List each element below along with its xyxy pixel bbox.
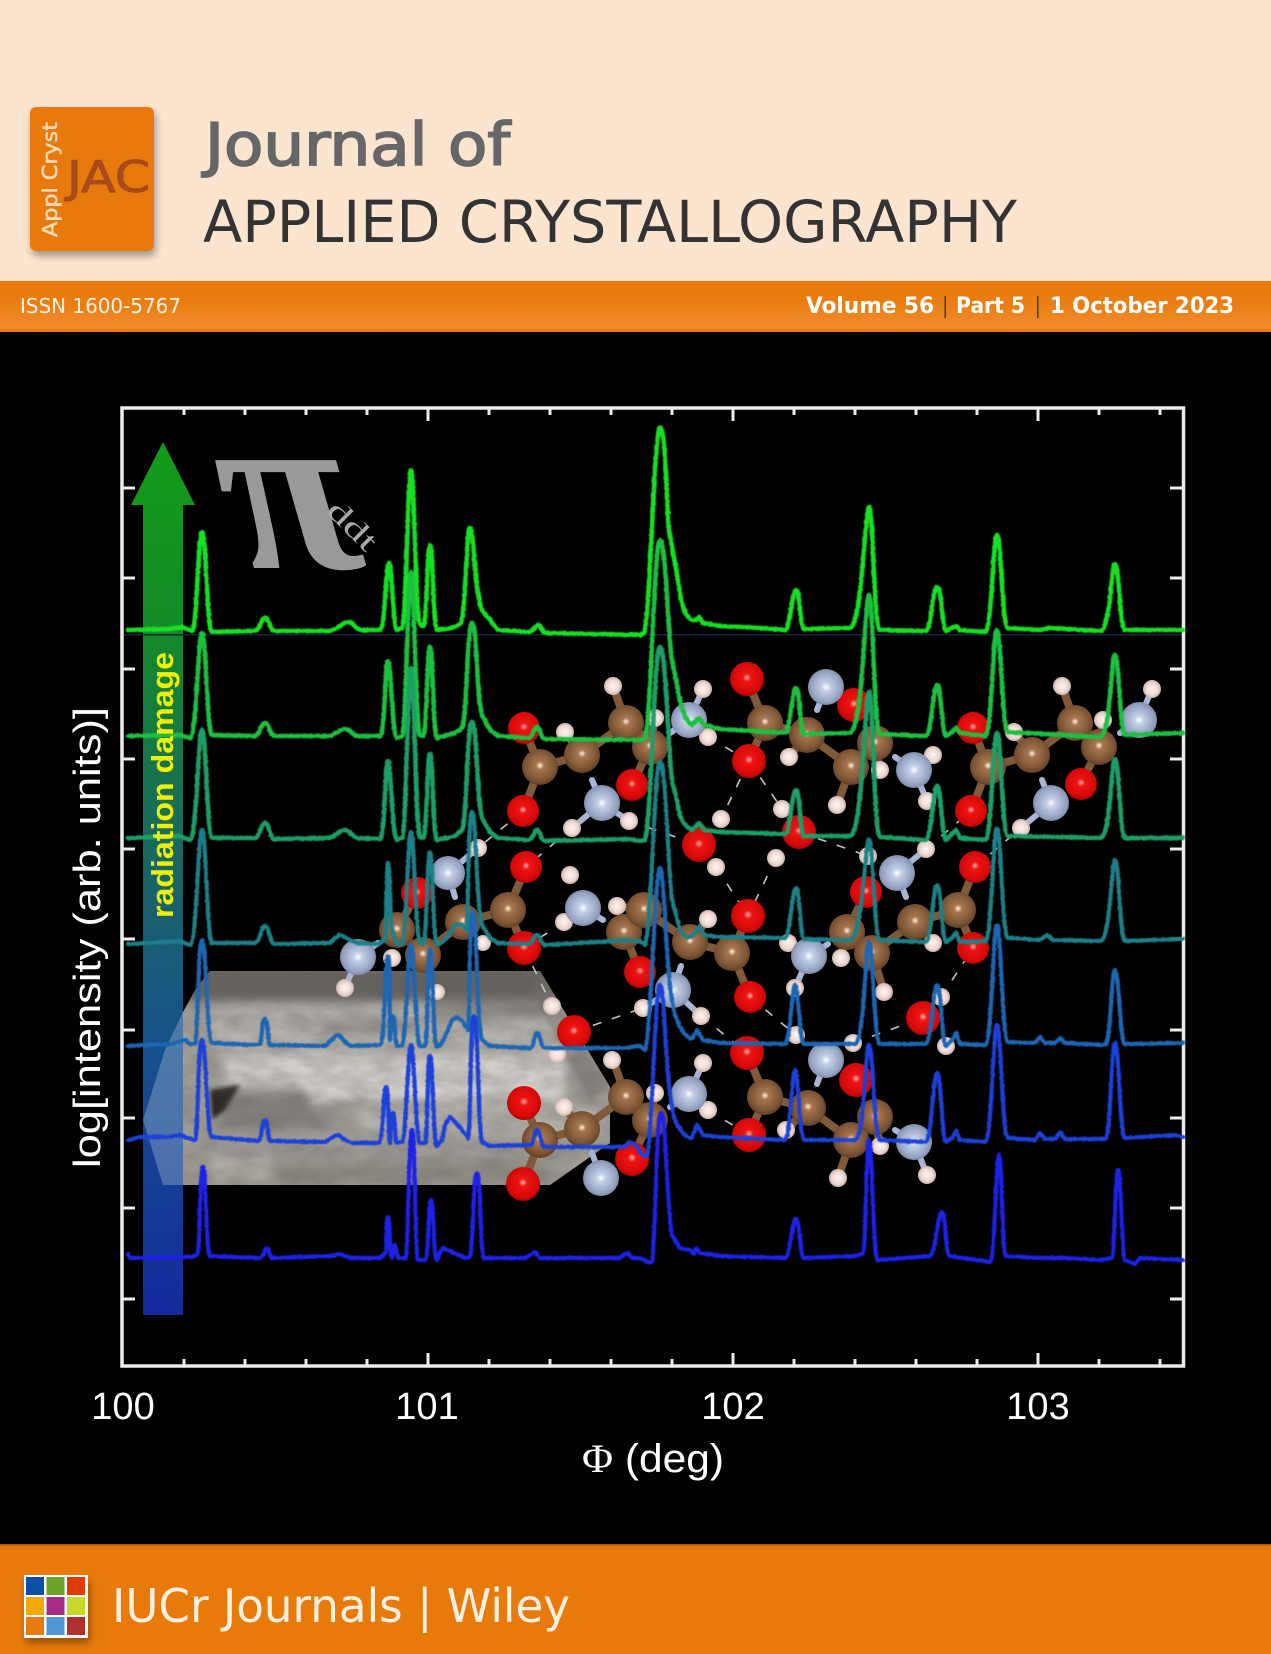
trace 2: green: [128, 540, 1183, 740]
faint navy reference line: [122, 634, 1183, 636]
trace 4: teal: [128, 762, 1183, 945]
covalent bonds: [397, 679, 1103, 1184]
nitrogen atoms: [340, 669, 1157, 1196]
part: Part 5: [956, 294, 1025, 319]
date: 1 October 2023: [1050, 294, 1234, 319]
trace 5: medium blue: [128, 868, 1183, 1050]
trace 7: lowest dose, pure blue: [128, 1113, 1183, 1264]
oxygen atoms: [401, 662, 1097, 1201]
plot frame and ticks: [122, 408, 1184, 1366]
title: Applied Crystallography: APPLIED CRYSTALLOGRAPHY: [203, 188, 1018, 256]
pi ddt logo: [180, 358, 385, 619]
trace 3: sea green: [128, 647, 1183, 841]
x axis tick labels: 100: [91, 1386, 155, 1428]
ISSN: ISSN 1600-5767: [20, 294, 181, 318]
title: Journal of: Journal of: [201, 110, 511, 179]
carbon atoms: [379, 705, 1117, 1158]
header background: [0, 0, 1271, 281]
logo text: Appl Cryst: Appl Cryst: [38, 122, 62, 237]
trace 6: royal blue: [128, 985, 1183, 1156]
crystal photograph: [143, 965, 620, 1190]
logo text: JAC: JAC: [64, 152, 150, 203]
x axis tick labels: [91, 1386, 1070, 1428]
y axis label: log[intensity (arb. units)]: [67, 707, 109, 1168]
hydrogen bonds: [478, 737, 1021, 1135]
ddt: ddt: [320, 494, 385, 559]
radiation damage arrow: [131, 442, 195, 1315]
molecular structure: [336, 662, 1161, 1201]
volume: Volume 56: [806, 294, 934, 319]
x axis title: Φ (deg): [582, 1436, 724, 1481]
journal logo: [30, 107, 154, 251]
x axis tick labels: 102: [701, 1386, 765, 1428]
trace 1: highest dose, bright green: [128, 428, 1183, 635]
x axis tick labels: 103: [1006, 1386, 1070, 1428]
footer band: [0, 1544, 1271, 1654]
pi symbol: π: [180, 358, 384, 619]
hydrogen atoms: [336, 677, 1161, 1187]
arrow label: radiation damage: radiation damage: [145, 652, 180, 918]
x axis tick labels: 101: [395, 1386, 459, 1428]
black cover background: [0, 332, 1271, 1545]
issue information band: [0, 281, 1271, 332]
IUCr logo grid: [24, 1575, 88, 1638]
nitrogen and hydrogen bonds: [345, 687, 1152, 1178]
publisher name: IUCr Journals | Wiley: [112, 1579, 570, 1634]
diffraction traces: [128, 428, 1183, 1264]
